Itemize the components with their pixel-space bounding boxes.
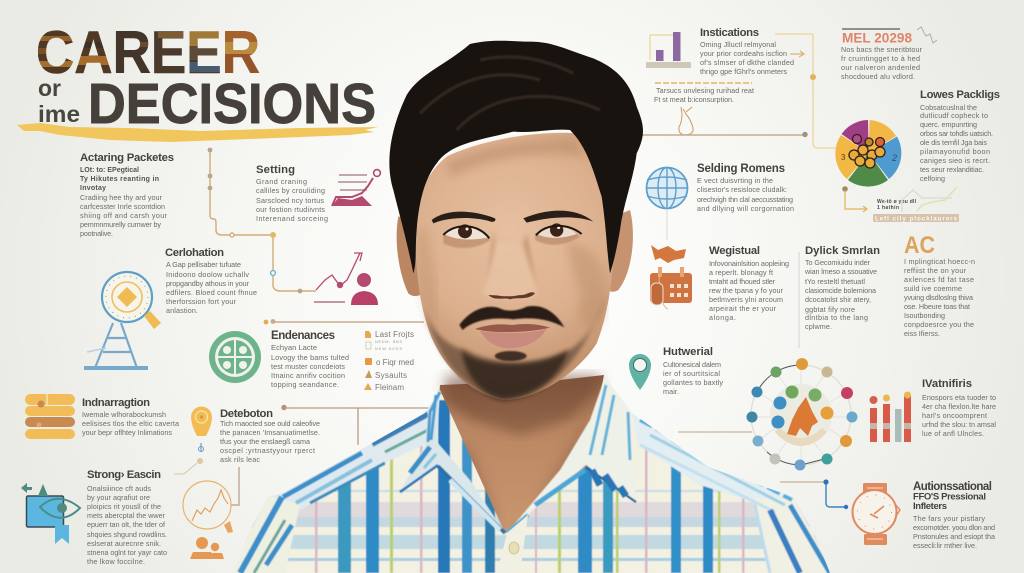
text block: orechvigh thn clal aeccusstating bbox=[697, 195, 793, 204]
icon: stacked bars bbox=[25, 394, 75, 439]
panel: ac bbox=[904, 232, 975, 338]
left sleeve bbox=[238, 496, 300, 562]
icon: globe bbox=[646, 168, 688, 208]
text block: pemmnmurelly cumwer by bbox=[80, 220, 161, 229]
text block: The fars your pistlary bbox=[913, 514, 985, 523]
heading: IVatnifiris bbox=[922, 378, 972, 390]
panel: endenances bbox=[209, 319, 424, 392]
icon: orange calendar and animal bbox=[650, 245, 692, 309]
text block: celfoing bbox=[920, 174, 945, 183]
face bbox=[416, 133, 614, 400]
text block: ier of sourtitsical bbox=[663, 369, 720, 378]
text block: Iwemale wlhorabockumsh bbox=[82, 410, 166, 419]
heading: Cerlohation bbox=[165, 247, 224, 259]
panel: wegistual bbox=[650, 245, 789, 322]
text block bbox=[220, 419, 320, 464]
text block: dlntbia to the lang bbox=[805, 313, 868, 322]
panel: mel 20298 bbox=[841, 27, 937, 81]
text block: lue of anfl Ulncles. bbox=[922, 429, 984, 438]
hair highlights bbox=[420, 57, 600, 130]
text block: Lovogy the bams tulted bbox=[271, 353, 349, 362]
text block: oscpel :yrtnastyyour rperct bbox=[220, 446, 315, 455]
list with icons: NEDM: BBS bbox=[375, 340, 402, 344]
text block: Invotay bbox=[80, 185, 106, 192]
panel: hutwerial bbox=[629, 346, 723, 396]
text block: eelisises tlos the eltic caverta bbox=[82, 419, 179, 428]
text block: tes seur rexlanditiac. bbox=[920, 165, 984, 174]
connector with small chart note bbox=[842, 186, 959, 222]
face shading bbox=[416, 139, 605, 340]
subheading line two: Infleters bbox=[913, 501, 947, 512]
heading: Dylick Smrlan bbox=[805, 245, 880, 257]
text block: gollantes to baxtly bbox=[663, 378, 723, 387]
icon: chart magnifier bbox=[183, 481, 233, 533]
ear: right bbox=[607, 210, 633, 292]
heading: Actaring Packetes bbox=[80, 152, 174, 164]
text block: clisestor's resisloce cludalk: bbox=[697, 185, 787, 194]
text block: orbos sar tohdls uatsich. bbox=[920, 129, 993, 138]
text block: Sarscloed ncy tortus bbox=[256, 196, 324, 205]
text block bbox=[841, 45, 923, 81]
right sleeve bbox=[756, 498, 826, 562]
text block: alonga. bbox=[709, 313, 736, 322]
text block: Cradiing hee thy ard your bbox=[80, 193, 163, 202]
connector with small chart note: 1 hathin bbox=[877, 205, 899, 211]
text block: reffiist the on your bbox=[904, 266, 967, 275]
text block: Onalsiiince cft auds bbox=[87, 484, 151, 493]
text block: LOt: to: EPegtical bbox=[80, 167, 139, 174]
text block: Interenand sorceing bbox=[256, 214, 328, 223]
text block: Itnainc anrifiv cocition bbox=[271, 371, 345, 380]
collar: left bbox=[400, 390, 505, 533]
portrait: man in plaid shirt bbox=[230, 41, 840, 573]
text block: cplwme. bbox=[805, 322, 832, 331]
text block: stnena oglnt tor yayr cato bbox=[87, 548, 167, 557]
list with icons: Last Frojts bbox=[375, 330, 414, 339]
text block: epuerr tan olt, the tder of bbox=[87, 520, 165, 529]
squiggle bbox=[917, 27, 937, 43]
text block: therforssion fort your bbox=[166, 297, 237, 306]
text block: the lkow foccilne. bbox=[87, 557, 145, 566]
heading: Endenances bbox=[271, 330, 335, 342]
text block: essecli:lir mther live. bbox=[913, 541, 977, 550]
connector: gold elbow bbox=[775, 34, 836, 148]
title bbox=[17, 19, 378, 142]
text block bbox=[904, 257, 975, 338]
heading: Autionssational bbox=[913, 481, 992, 493]
text block bbox=[922, 393, 996, 438]
heading: MEL 20298 bbox=[842, 30, 912, 46]
heading: Lowes Packligs bbox=[920, 89, 1000, 101]
text block: I mplingticat hoecc-n bbox=[904, 257, 975, 266]
left yoke bbox=[272, 400, 440, 510]
text block: shocdoued alu vdlord. bbox=[841, 72, 915, 81]
top rule bbox=[842, 28, 900, 30]
text block bbox=[80, 167, 168, 238]
text block: edfilers. Bloed count fhnue bbox=[166, 288, 257, 297]
panel: instications bbox=[640, 27, 836, 148]
connector with small chart note: We-tô ø ypu dll bbox=[877, 199, 917, 205]
text block: Oming Jlluctl relmyonal bbox=[700, 40, 776, 49]
text block bbox=[700, 40, 794, 76]
text block: the panacen 'Imsanuatimetlse. bbox=[220, 428, 320, 437]
text block: calliles by crouliding bbox=[256, 186, 325, 195]
dashed divider with note: Tarsucs unvlesing rurihad reat bbox=[656, 86, 754, 95]
text block bbox=[166, 260, 257, 315]
text block: Infovonainlsition aopleiing bbox=[709, 259, 789, 268]
title word: or: or bbox=[38, 75, 61, 101]
text block: a reperlt. blonagy ft bbox=[709, 268, 773, 277]
panel: selding romens bbox=[646, 163, 794, 240]
text block: tYo resteltl thetuatl bbox=[805, 277, 865, 286]
text block: propgandby athous in your bbox=[166, 279, 250, 288]
connector rule bbox=[281, 405, 430, 445]
text block: ploipics rit yousll of the bbox=[87, 502, 161, 511]
text block: axlences fd fat tase bbox=[904, 275, 974, 284]
text block: harl's oncoomprent bbox=[922, 411, 987, 420]
text block bbox=[663, 360, 723, 396]
text block: topping seandance. bbox=[271, 380, 339, 389]
panel: dylick smrlan bbox=[799, 245, 880, 348]
title word: career: CAREER bbox=[36, 19, 260, 86]
soul patch bbox=[495, 351, 527, 361]
icon: yellow bulb pin bbox=[174, 406, 212, 474]
icon: rising chart and person bbox=[314, 253, 378, 305]
text block: betlmveris ylni arcoum bbox=[709, 295, 783, 304]
eye left bbox=[443, 224, 490, 248]
text block bbox=[256, 177, 328, 223]
thin drop line bbox=[666, 209, 668, 240]
text block: conpdoesrce you the bbox=[904, 320, 974, 329]
text block: Inidoono doolow uchallv bbox=[166, 270, 249, 279]
text block: shiing off and carsh your bbox=[80, 211, 168, 220]
head: scaled group bbox=[389, 41, 643, 400]
text block: A Gap pellisaber tufuate bbox=[166, 260, 241, 269]
ear: left bbox=[397, 217, 422, 296]
icon: sun and magnifier bbox=[102, 272, 161, 329]
text block: tmtaht ad fhoued stler bbox=[709, 277, 776, 286]
panel: actaring packetes bbox=[80, 152, 174, 238]
panel: lowes packligs bbox=[835, 89, 1000, 222]
text block: arpeirait the er your bbox=[709, 304, 777, 313]
placket and button bbox=[497, 515, 528, 573]
heading: Setting bbox=[256, 164, 295, 176]
panel: ivatnifiris bbox=[870, 378, 996, 442]
text block bbox=[87, 484, 167, 566]
dashed divider with note: Ft st meat b:iconsurption. bbox=[654, 95, 734, 104]
text block: caniges sieo is recrt. bbox=[920, 156, 990, 165]
text block: mair. bbox=[663, 387, 679, 396]
neck bbox=[436, 375, 604, 535]
heading: AC bbox=[904, 232, 935, 259]
text block bbox=[709, 259, 789, 322]
text block: anlastion. bbox=[166, 306, 198, 315]
title word: decisions: DECISIONS bbox=[88, 72, 376, 136]
text block: ask rils leac bbox=[220, 455, 260, 464]
text block: Ty Hikutes reanting in bbox=[80, 176, 159, 183]
hair bbox=[389, 41, 643, 273]
text block: rew the tpana y fo your bbox=[709, 286, 784, 295]
text block: and dllying will corgornation bbox=[697, 204, 794, 213]
list with icons bbox=[364, 330, 414, 392]
text block: of's slmser of dkthe clanded bbox=[700, 58, 794, 67]
text block bbox=[913, 514, 995, 550]
text block: fr cruintingget to à hed bbox=[841, 54, 920, 63]
shirt bbox=[234, 390, 830, 573]
icon: watch bbox=[852, 483, 900, 545]
text block bbox=[920, 103, 993, 183]
dashed divider with note bbox=[654, 83, 754, 104]
mustache bbox=[459, 306, 564, 330]
text block: ose. Hbeure toas that bbox=[904, 302, 970, 311]
panel: setting bbox=[256, 164, 380, 223]
bar chart bbox=[870, 392, 911, 442]
text block: eiss Ifierss. bbox=[904, 329, 940, 338]
icon: blue ladder tower bbox=[84, 323, 148, 368]
icon: people group bbox=[190, 537, 224, 559]
subheading: FFO'S Pressional bbox=[913, 492, 986, 502]
text block bbox=[82, 410, 179, 437]
text block: querc. empunrting bbox=[920, 120, 977, 129]
list with icons: Fleinam bbox=[375, 383, 404, 392]
brow left bbox=[432, 212, 495, 223]
text block: pilamayonufid boon bbox=[920, 147, 990, 156]
upper lip bbox=[475, 324, 550, 332]
text block: 4er cha flexlon.lte hare bbox=[922, 402, 996, 411]
heading: Selding Romens bbox=[697, 163, 785, 175]
connector with small chart note: Lefl cily plocklaurers bbox=[875, 216, 958, 222]
text block: Grand craning bbox=[256, 177, 307, 186]
text block: Isoutbonding bbox=[904, 311, 945, 320]
collar: right bbox=[507, 377, 636, 533]
text block: thrigo gpe fGhrl's onmeters bbox=[700, 67, 787, 76]
brow right bbox=[523, 211, 593, 223]
text block: tfus your the enslaegß cama bbox=[220, 437, 310, 446]
chin beard bbox=[462, 350, 568, 399]
heading: Strong› Eascin bbox=[87, 469, 161, 481]
pie chart: 2 bbox=[891, 153, 897, 163]
text block: E vect duisvrting in the bbox=[697, 176, 773, 185]
text block: our nalveron andenled bbox=[841, 63, 920, 72]
text block: shqoies shgund rowdlins. bbox=[87, 530, 167, 539]
right yoke bbox=[632, 414, 784, 500]
icon: bar chart bbox=[646, 32, 691, 68]
text block: dcocatolst shir atery, bbox=[805, 295, 871, 304]
yellow brush underline bbox=[17, 123, 378, 142]
connector to magnifier bbox=[231, 467, 239, 505]
text block: ggbtat fify nore bbox=[805, 305, 855, 314]
icon: circular network bbox=[678, 358, 858, 470]
text block: dutlicudf copheck to bbox=[920, 111, 988, 120]
text block: Tich rnaocted soe ould caleofive bbox=[220, 419, 320, 428]
icon: teal map pin bbox=[629, 354, 651, 390]
lower lip bbox=[480, 329, 547, 348]
text block: Enospors eta tuoder to bbox=[922, 393, 996, 402]
icon: writing desk bbox=[332, 170, 380, 206]
subheading: Echyan Lacte bbox=[271, 343, 317, 352]
icon: green badge bbox=[209, 331, 261, 383]
panel: indnarragtion bbox=[25, 394, 179, 439]
text block: To Gecomiuidu inder bbox=[805, 258, 871, 267]
panel: strong easin bbox=[21, 469, 167, 566]
text block: your prior cordeahs iscfion bbox=[700, 49, 787, 58]
connector top rule bbox=[264, 319, 424, 324]
list with icons: NEW AVGS bbox=[375, 347, 402, 351]
connector: gold timeline bbox=[208, 148, 316, 293]
eye right bbox=[535, 223, 582, 245]
vertical rule bbox=[798, 252, 800, 348]
text block: urfnd the slou: tn amsal bbox=[922, 420, 996, 429]
icon: blue folder and ribbon bbox=[21, 483, 80, 544]
text block: test muster concdeiots bbox=[271, 362, 345, 371]
text block: suild ive coemme bbox=[904, 284, 962, 293]
text block: wian lmeso a ssouative bbox=[804, 267, 877, 276]
text block bbox=[271, 353, 349, 389]
pie chart bbox=[835, 120, 901, 187]
panel: deteboton bbox=[174, 405, 430, 559]
title word: ime: ime bbox=[38, 101, 80, 127]
panel: cerlohation bbox=[84, 247, 257, 368]
heading: Wegistual bbox=[709, 245, 760, 257]
text block: Nos bacs the sneritbtour bbox=[841, 45, 923, 54]
heading: Deteboton bbox=[220, 408, 273, 420]
text block: by your aqrafiut ore bbox=[87, 493, 150, 502]
text block bbox=[804, 258, 877, 331]
text block: carfcesster Inrle scontdion bbox=[80, 202, 165, 211]
text block: yvuing dlsdloslng thiva bbox=[904, 293, 973, 302]
text block: Cobsatcuslnal the bbox=[920, 103, 977, 112]
nose bbox=[483, 243, 537, 299]
heading: Hutwerial bbox=[663, 346, 713, 358]
text block: your bepr oflhtey Inlimations bbox=[82, 428, 172, 437]
text block: ole dis ternfil Jga bais bbox=[920, 138, 987, 147]
text block: eslserat aurecnre snik. bbox=[87, 539, 161, 548]
pie chart: 3 bbox=[841, 153, 846, 162]
connector bbox=[780, 479, 848, 509]
stubble bbox=[423, 293, 607, 400]
connector: tan rule with dot bbox=[640, 132, 808, 137]
text block: pootnalive. bbox=[80, 229, 113, 238]
text block: excornotder. yoou dlon and bbox=[913, 523, 995, 532]
heading: Indnarragtion bbox=[82, 397, 150, 409]
list with icons: Sysaults bbox=[375, 371, 407, 380]
list with icons: o Fiqr med bbox=[376, 358, 414, 367]
icon: cat outline bbox=[679, 107, 693, 135]
text block: mets abercptal the wwer bbox=[87, 511, 166, 520]
heading: Instications bbox=[700, 27, 759, 39]
text block: our fostion rtudiivnts bbox=[256, 205, 325, 214]
text block bbox=[697, 176, 794, 213]
panel: autionssational bbox=[780, 479, 995, 550]
text block: clasiomcide bolemiona bbox=[805, 286, 876, 295]
text block: Pnstonules and esiopt tha bbox=[913, 532, 995, 541]
text block: Cultonesical dalem bbox=[663, 360, 721, 369]
